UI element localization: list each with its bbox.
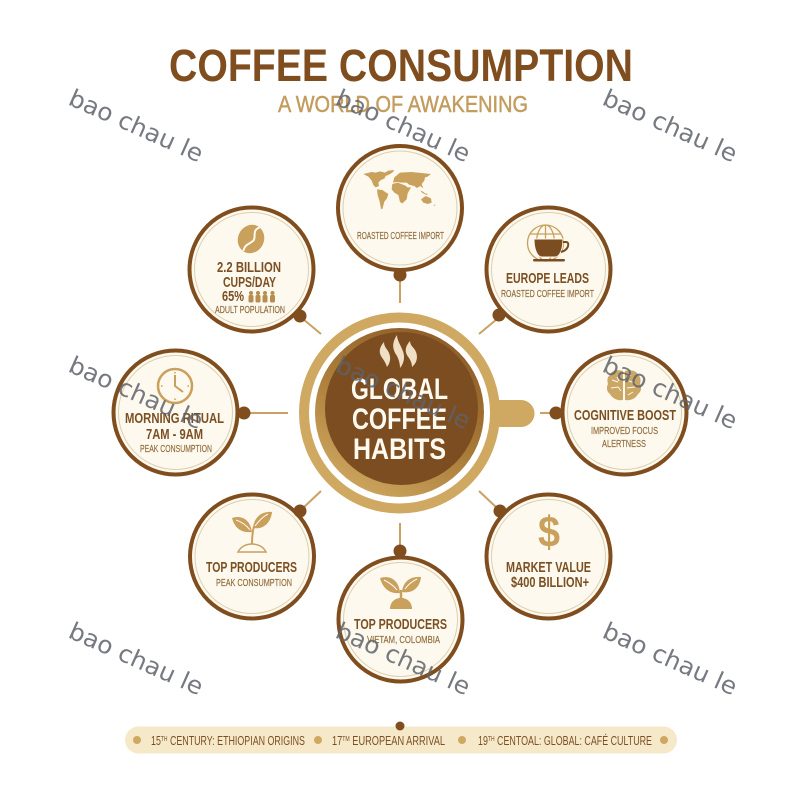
panel: morning ritual: PEAK CONSUMPTION bbox=[140, 443, 212, 455]
panel: Europe leads bbox=[486, 208, 610, 332]
text: import label: ROASTED COFFEE IMPORT bbox=[357, 230, 444, 242]
panel: top producers bottom: VIETAM, COLOMBIA bbox=[367, 634, 440, 646]
timeline dots bbox=[133, 736, 668, 744]
panel: daily cups: 65% bbox=[222, 288, 244, 305]
watermarks: bao chau le bbox=[599, 84, 741, 168]
panel: daily cups: CUPS/DAY bbox=[223, 274, 276, 291]
central coffee cup bbox=[304, 318, 534, 508]
icon: coffee bean bbox=[233, 220, 269, 258]
watermarks: bao chau le bbox=[65, 351, 207, 435]
panel: cognitive boost: IMPROVED FOCUS bbox=[591, 425, 658, 437]
center heading: COFFEE bbox=[352, 403, 447, 436]
timeline entry: 19th century: CENTOAL: GLOBAL: CAFÉ CULTURE bbox=[495, 733, 652, 748]
watermarks: bao chau le bbox=[65, 617, 207, 701]
coffee surface bbox=[315, 328, 484, 497]
icon: world map bbox=[363, 170, 435, 209]
watermarks: bao chau le bbox=[332, 351, 474, 435]
timeline entry: 15th century: 15 bbox=[151, 734, 165, 748]
text: adult population: ADULT POPULATION bbox=[215, 304, 285, 316]
icon: clock bbox=[158, 369, 192, 403]
text: top producers: TOP PRODUCERS bbox=[354, 616, 447, 633]
panel: morning ritual: 7AM - 9AM bbox=[146, 426, 203, 443]
text: cognitive boost: COGNITIVE BOOST bbox=[574, 407, 676, 424]
icon: sprout outline bbox=[232, 512, 272, 552]
icon: people bbox=[248, 291, 275, 302]
timeline entry: 17th century: EUROPEAN ARRIVAL bbox=[350, 734, 445, 748]
cup handle bbox=[495, 400, 534, 427]
timeline entry: 15th century: CENTURY: ETHIOPIAN ORIGINS bbox=[168, 734, 305, 748]
watermarks: bao chau le bbox=[599, 351, 741, 435]
text: billion cups: 2.2 BILLION bbox=[217, 259, 281, 276]
steam bbox=[380, 335, 417, 368]
subtitle: A WORLD OF AWAKENING bbox=[278, 91, 528, 117]
panel: top producers left bbox=[190, 494, 314, 618]
icon: brain bbox=[607, 370, 641, 400]
text: morning ritual: MORNING RITUAL bbox=[125, 410, 224, 427]
timeline bar bbox=[125, 722, 677, 754]
watermarks: bao chau le bbox=[332, 617, 474, 701]
panel: top producers left: PEAK CONSUMPTION bbox=[216, 577, 292, 589]
panel: market value: $400 BILLION+ bbox=[511, 574, 589, 591]
icon: globe and cup bbox=[528, 225, 568, 262]
text: market value: MARKET VALUE bbox=[506, 559, 591, 576]
center heading: GLOBAL bbox=[351, 373, 448, 406]
timeline entry: 19th century: TH bbox=[488, 736, 495, 743]
timeline entry: 19th century: 19 bbox=[478, 734, 492, 748]
icon: sprout bbox=[380, 577, 421, 609]
timeline entry: 17th century: TM bbox=[342, 736, 350, 743]
panel: top producers bottom bbox=[338, 544, 462, 682]
icon: dollar: $ bbox=[538, 508, 560, 557]
watermarks: bao chau le bbox=[332, 84, 474, 168]
text: Europe leads: EUROPE LEADS bbox=[506, 270, 589, 287]
panel: daily cups bbox=[190, 208, 314, 332]
connectors from the cup to the topic circles bbox=[244, 278, 556, 548]
panel: Europe leads: ROASTED COFFEE IMPORT bbox=[501, 288, 594, 300]
timeline entry: 15th century: TH bbox=[161, 736, 168, 743]
panel: morning ritual bbox=[114, 350, 250, 474]
panel: market value bbox=[486, 494, 610, 618]
text: top producers: TOP PRODUCERS bbox=[206, 559, 297, 576]
title: COFFEE CONSUMPTION bbox=[169, 40, 633, 91]
panel: world map bbox=[338, 146, 462, 282]
watermarks: bao chau le bbox=[65, 84, 207, 168]
center heading: HABITS bbox=[353, 433, 446, 466]
timeline entry: 17th century: 17 bbox=[332, 734, 346, 748]
watermarks bbox=[65, 84, 741, 701]
panel: cognitive boost bbox=[550, 350, 686, 474]
cup rim bbox=[304, 318, 495, 508]
watermarks: bao chau le bbox=[599, 617, 741, 701]
panel: cognitive boost: ALERTNESS bbox=[602, 438, 646, 450]
center heading bbox=[351, 373, 448, 466]
